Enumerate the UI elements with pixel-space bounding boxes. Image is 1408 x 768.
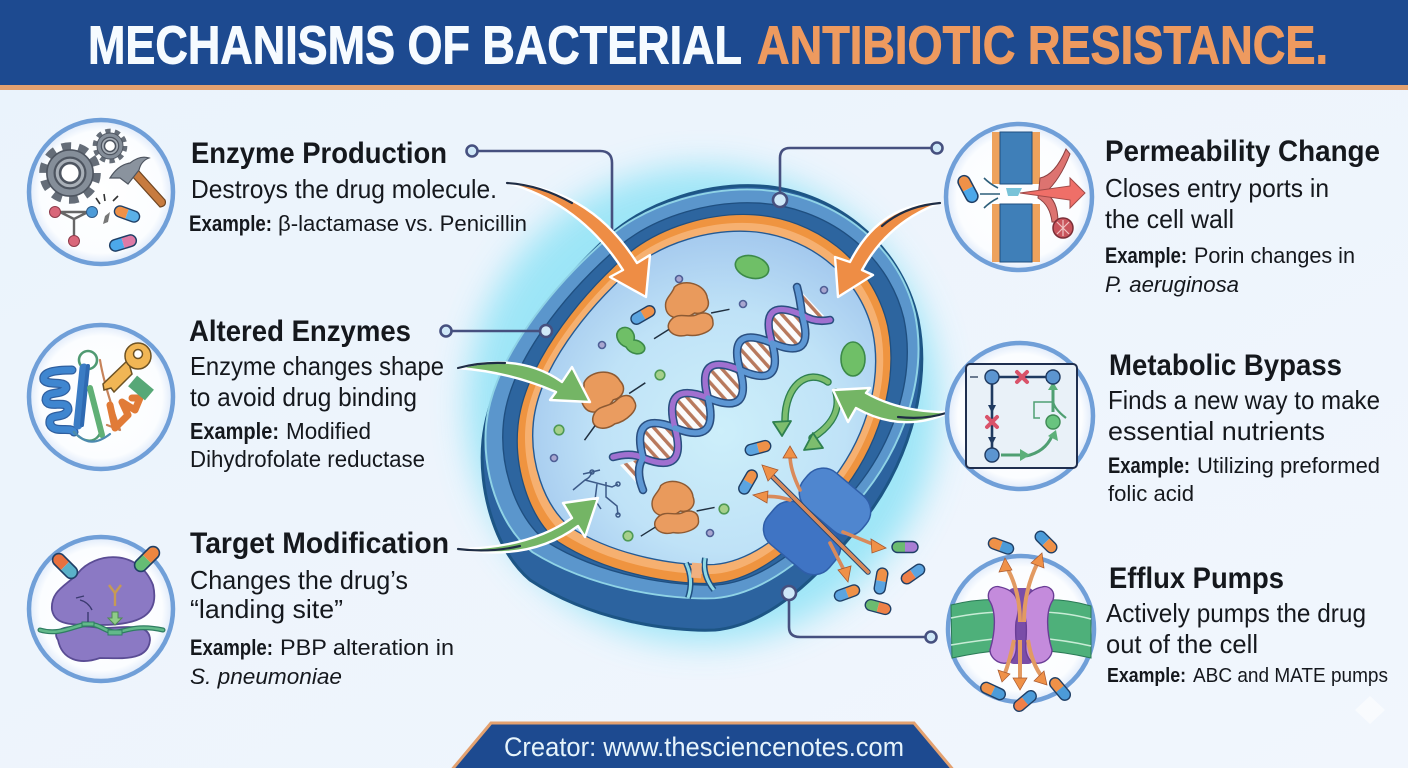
text: altered enzymes: Modified xyxy=(286,418,371,444)
text: altered enzymes xyxy=(189,315,444,472)
text: permeability change: P. aeruginosa xyxy=(1105,272,1239,297)
text: efflux pumps xyxy=(1106,562,1388,687)
text: altered enzymes: Enzyme changes shape xyxy=(190,351,444,381)
text: metabolic bypass: Utilizing preformed xyxy=(1197,453,1380,478)
ribosomes xyxy=(563,283,729,536)
text: target modification: Target Modification xyxy=(190,527,449,560)
arrow: metabolic bypass xyxy=(833,388,946,422)
icon: enzyme production xyxy=(29,120,173,264)
efflux pump xyxy=(753,446,886,583)
connector: permeability change xyxy=(773,142,942,207)
text: target modification: Changes the drug’s xyxy=(190,565,408,595)
text: permeability change: the cell wall xyxy=(1105,204,1234,234)
text: efflux pumps: out of the cell xyxy=(1106,629,1258,659)
title: MECHANISMS OF BACTERIAL xyxy=(88,16,742,76)
arrow: target modification xyxy=(458,498,598,552)
text: altered enzymes: Example: xyxy=(190,418,279,444)
text: metabolic bypass: folic acid xyxy=(1108,481,1194,506)
icon: altered enzymes xyxy=(29,325,173,469)
wall gap xyxy=(686,558,714,598)
text: altered enzymes: to avoid drug binding xyxy=(190,382,417,412)
text: metabolic bypass: essential nutrients xyxy=(1108,416,1325,446)
text: efflux pumps: Efflux Pumps xyxy=(1109,562,1284,595)
text: metabolic bypass: Metabolic Bypass xyxy=(1109,349,1342,382)
bypass arrows in cell xyxy=(773,377,837,450)
text: efflux pumps: Actively pumps the drug xyxy=(1106,598,1366,628)
drug pills in cell xyxy=(629,304,927,616)
text: altered enzymes: Altered Enzymes xyxy=(189,315,411,348)
arrow: permeability change xyxy=(835,203,940,297)
text: permeability change: Porin changes in xyxy=(1194,243,1355,268)
central bacterial cell diagram xyxy=(467,167,939,643)
connector: altered enzymes xyxy=(440,325,552,337)
footer banner xyxy=(450,723,955,768)
text: permeability change: Example: xyxy=(1105,243,1187,268)
connector: enzyme production xyxy=(466,146,612,232)
arrow: enzyme production xyxy=(507,183,650,297)
text: enzyme production: Destroys the drug molecule. xyxy=(191,174,497,204)
cell glow xyxy=(467,167,939,643)
icon: permeability change xyxy=(946,124,1092,270)
connector: efflux pumps xyxy=(782,586,936,642)
text: metabolic bypass: Example: xyxy=(1108,453,1190,478)
organelles xyxy=(617,252,865,376)
small molecule dots xyxy=(550,276,828,541)
arrow: altered enzymes xyxy=(458,362,590,402)
text: altered enzymes: Dihydrofolate reductase xyxy=(190,446,425,472)
DNA double helix xyxy=(613,287,830,490)
header banner xyxy=(0,0,1408,90)
cell wall layers xyxy=(482,186,922,630)
text: target modification: Example: xyxy=(190,635,273,660)
text: target modification: “landing site” xyxy=(190,594,343,624)
text: permeability change: Permeability Change xyxy=(1105,135,1380,168)
icon: target modification xyxy=(29,537,173,681)
text: permeability change xyxy=(1105,135,1380,297)
text: target modification xyxy=(190,527,454,689)
text: target modification: PBP alteration in xyxy=(280,635,454,660)
text: enzyme production: Enzyme Production xyxy=(191,137,447,170)
text: efflux pumps: Example: xyxy=(1107,664,1186,687)
text: efflux pumps: ABC and MATE pumps xyxy=(1193,664,1388,687)
text: metabolic bypass: Finds a new way to make xyxy=(1108,385,1380,415)
icon: efflux pumps xyxy=(948,529,1094,714)
text: enzyme production: Example: xyxy=(189,211,272,236)
altered target molecule xyxy=(573,470,620,517)
text: enzyme production: β-lactamase vs. Penicillin xyxy=(278,211,527,236)
text: enzyme production xyxy=(189,137,527,236)
title xyxy=(88,16,1328,76)
footer banner: Creator: www.thesciencenotes.com xyxy=(504,732,904,762)
text: target modification: S. pneumoniae xyxy=(190,664,342,689)
text: permeability change: Closes entry ports in xyxy=(1105,173,1329,203)
text: metabolic bypass xyxy=(1108,349,1380,506)
icon: metabolic bypass xyxy=(947,343,1093,489)
watermark diamond xyxy=(1355,696,1385,724)
